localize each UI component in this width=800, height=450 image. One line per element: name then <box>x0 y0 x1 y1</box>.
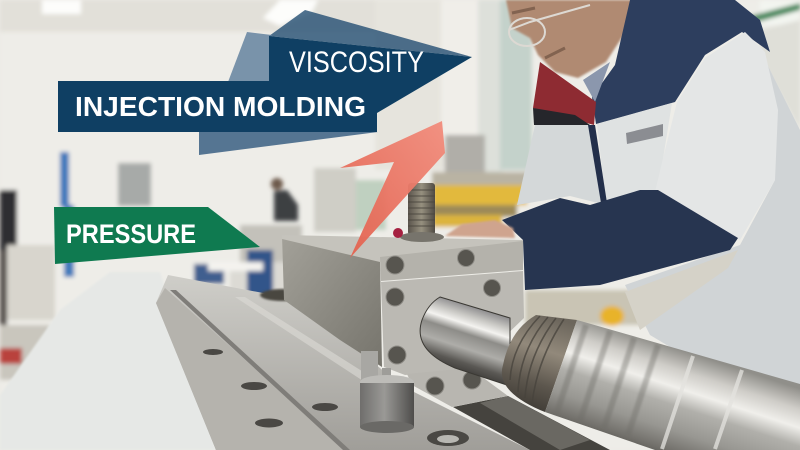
callout: viscosity arrow: VISCOSITY <box>289 46 424 79</box>
block left side <box>282 235 382 367</box>
chest logo <box>626 124 663 144</box>
callout: pressure arrow <box>54 207 260 264</box>
jacket lower hem <box>625 250 738 330</box>
dark collar band <box>533 108 590 125</box>
callout: lower faded wedge <box>199 132 378 155</box>
callout: injection molding banner <box>58 81 377 132</box>
threaded collar <box>502 315 577 412</box>
torso grey panels <box>517 125 606 205</box>
white table surface <box>0 272 216 450</box>
bottom block <box>407 368 508 407</box>
narrow shaft <box>420 297 510 386</box>
callout: injection molding banner: INJECTION MOLDING <box>75 91 366 122</box>
zipper <box>588 125 607 203</box>
upper arm sleeve <box>655 32 778 240</box>
mold block <box>282 183 524 407</box>
navy yoke <box>592 0 770 124</box>
block lower front <box>381 271 524 375</box>
hand <box>445 220 515 238</box>
glasses <box>509 5 590 46</box>
block top face <box>282 235 523 262</box>
callout: viscosity arrow slate wing <box>228 32 272 82</box>
barrel rings <box>662 356 742 449</box>
block upper front <box>380 241 523 281</box>
jacket right lower body <box>625 60 800 395</box>
navy forearm sleeve <box>502 190 738 290</box>
arrow: red upward trend <box>340 121 445 258</box>
screw barrel <box>420 297 800 450</box>
steel base plate <box>156 275 610 450</box>
ribbed section and barrel <box>545 320 800 450</box>
threaded stud <box>393 183 444 242</box>
plate bolt holes <box>203 349 469 446</box>
small steel post <box>360 351 414 433</box>
red collar <box>533 62 596 125</box>
callout: viscosity arrow faded back <box>269 10 472 57</box>
head <box>506 0 632 78</box>
brow and mouth shadows <box>512 8 565 58</box>
man: operator in jacket <box>445 0 800 395</box>
callout: viscosity arrow <box>269 36 472 113</box>
callout: pressure arrow: PRESSURE <box>66 219 196 249</box>
background worker <box>271 178 298 221</box>
shirt collar <box>583 62 610 102</box>
barrel ribs <box>556 325 658 435</box>
block holes <box>386 250 500 395</box>
